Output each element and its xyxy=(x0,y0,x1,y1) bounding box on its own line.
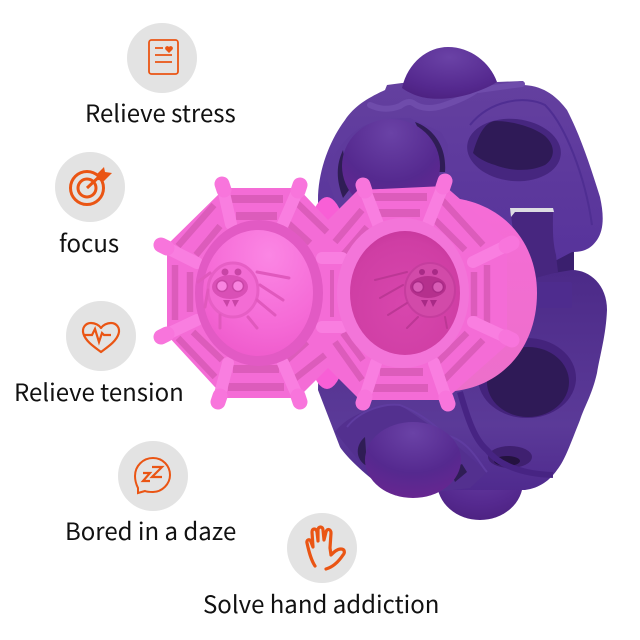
spider right xyxy=(375,263,455,328)
label: Bored in a daze: Bored in a daze xyxy=(65,512,236,547)
lower panel ridge xyxy=(347,405,487,472)
pink back body xyxy=(301,197,537,391)
bracelet: purple band xyxy=(318,47,607,520)
upper band xyxy=(318,81,603,300)
icon: target with arrow xyxy=(55,152,125,222)
slot xyxy=(530,282,572,308)
label: Solve hand addiction: Solve hand addiction xyxy=(203,585,439,620)
buckle strap xyxy=(510,208,558,282)
icon: raised hand xyxy=(287,513,357,583)
top dome xyxy=(402,47,497,99)
buckle highlight xyxy=(510,208,554,217)
label: Relieve tension: Relieve tension xyxy=(14,373,184,408)
bottom dome xyxy=(437,444,523,520)
upper left socket panel xyxy=(327,118,448,215)
lower band xyxy=(318,270,607,492)
spider left xyxy=(198,263,289,328)
lower hole xyxy=(487,347,569,417)
left dome xyxy=(203,230,313,356)
label: Relieve stress: Relieve stress xyxy=(85,94,236,129)
lower dome socket crescents xyxy=(358,437,467,482)
left dome recess xyxy=(195,220,323,366)
icon: speech bubble with zz xyxy=(118,441,188,511)
lower dome xyxy=(365,422,461,498)
web outer shape xyxy=(167,186,507,400)
upper hole xyxy=(473,121,553,170)
lower strip curve xyxy=(460,392,553,475)
web spokes left xyxy=(161,184,300,402)
icon: document with heart xyxy=(127,23,197,93)
lower small hole xyxy=(488,446,532,468)
label: focus: focus xyxy=(59,224,119,259)
web recessed segments xyxy=(228,197,428,388)
right dome recess xyxy=(337,218,469,368)
strap gap xyxy=(530,245,574,280)
web spoke knobs xyxy=(161,181,512,404)
web spokes right xyxy=(322,181,512,404)
lower left panel xyxy=(335,405,487,495)
lower hole rim xyxy=(478,338,576,418)
top flaps xyxy=(370,84,522,109)
middle dome xyxy=(342,119,440,213)
icon: heart with pulse xyxy=(66,301,136,371)
right dome pressed xyxy=(350,231,460,355)
pink spider web pop panel xyxy=(161,181,512,404)
upper hole rim xyxy=(464,114,564,186)
arch inner edge xyxy=(470,100,592,225)
middle dome socket crescents xyxy=(338,122,445,198)
centre slit xyxy=(330,270,334,317)
